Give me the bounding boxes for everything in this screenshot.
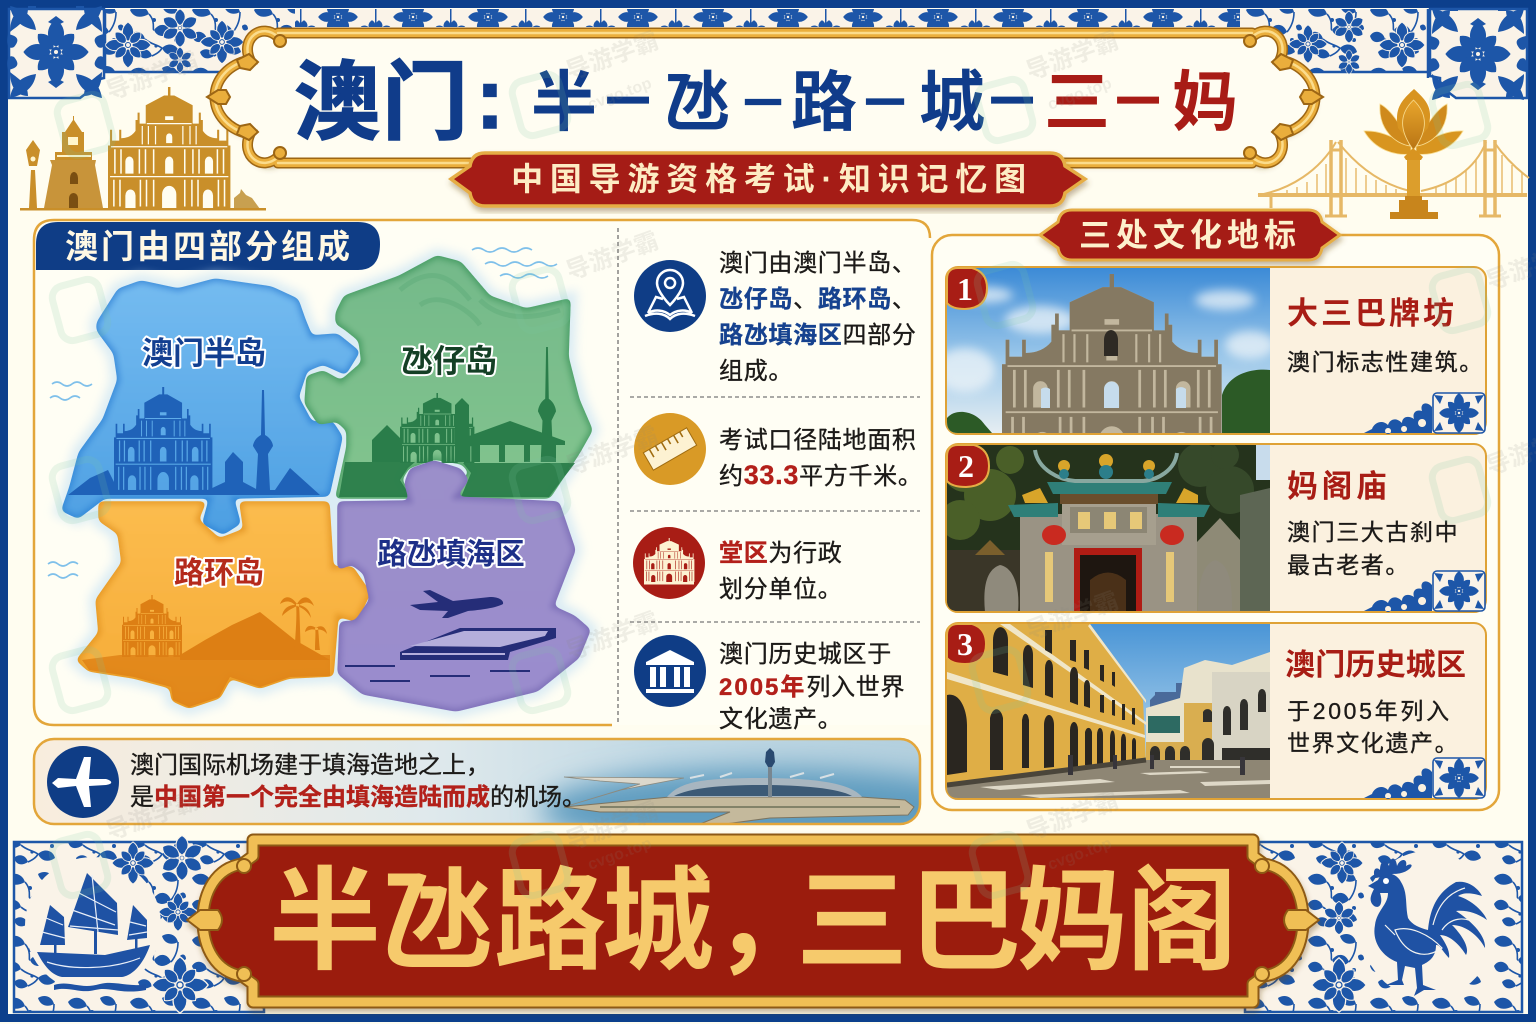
icon: golden lotus [1364,89,1463,219]
plaque text: 半 [269,859,381,984]
title mnemonic words: 一 [744,84,782,126]
text: world heritage: 文化遗产。 [719,706,842,733]
right side buildings [1146,652,1270,742]
text: land area: 考试口径陆地面积 [719,427,917,454]
card 2 description: 澳门三大古刹中 [1287,519,1459,545]
text: composition: 氹仔岛 [719,286,793,313]
text: composition: 澳门由澳门半岛、 [719,250,917,277]
watermarks: cvgo.top [586,75,654,114]
text: world heritage: 澳门历史城区于 [719,641,892,668]
airport terminal [400,628,556,660]
fact: composition [634,250,917,385]
callout text: 澳门国际机场建于填海造地之上， [130,752,490,779]
plaque text: 城 [602,859,714,984]
title mnemonic words: 路 [791,65,857,139]
panel heading ribbon: 三处文化地标 [1079,217,1301,253]
title mnemonic words: 半 [531,65,597,139]
temple door [1074,548,1142,612]
watermarks: 导游学霸 [103,47,202,106]
number badge 2: 2 [958,448,974,484]
icon: ruler [634,413,706,485]
divider dashed vertical [617,228,619,725]
title text [294,51,504,151]
title mnemonic words: 一 [990,78,1034,127]
card 3 description: 于2005年列入 [1287,698,1452,724]
icon: airplane badge [47,746,119,818]
plaque text: 三 [796,859,908,984]
card 3 description: 世界文化遗产。 [1287,730,1459,756]
temple roofs [1008,482,1210,517]
bottom tile band right [1245,840,1522,1015]
façade arched openings [1041,382,1186,408]
watermarks: cvgo.top [586,835,654,874]
fact: world heritage [634,635,905,733]
title mnemonic words: 一 [606,78,650,127]
icon: junk ship [37,873,150,992]
icon: small ruin [234,189,260,209]
plaque text: 巴 [909,859,1021,984]
callout text: 中国第一个完全由填海造陆而成的机场。 [154,784,586,811]
ground line [20,208,266,210]
watermarks: cvgo.top [1046,75,1114,114]
number badge 1: 1 [957,271,973,307]
card 1 description: 澳门标志性建筑。 [1287,349,1484,375]
label: 路环岛: 路环岛 [174,557,264,590]
bridge [1258,140,1529,216]
photo: A-Ma temple gate [940,441,1270,612]
text: composition: 四部分 [842,322,917,349]
text: land area: 33.3平方千米。 [744,460,923,490]
watermarks: 导游学霸 [563,227,662,286]
title banner [207,31,1323,164]
icon: guia lighthouse [44,116,103,208]
title text: 澳 [294,55,380,151]
text: composition: 路氹填海区 [719,322,842,349]
text: land area: 约 [719,463,744,490]
fact: parishes [633,527,843,603]
tile corner [1364,756,1485,800]
number badge 1 [947,268,987,309]
ornate gold frame [207,31,1323,163]
gold landmarks skyline left [20,87,266,210]
title mnemonic words: 三 [1044,65,1110,139]
plaque gold frame [187,840,1319,1002]
water ripples [48,248,557,578]
plaque text: 路 [494,859,606,984]
icon: ruins of st paul facade [108,87,230,209]
title text: : [476,51,504,147]
bottom mnemonic plaque [187,840,1319,1002]
airport callout band [32,738,922,826]
corner tile top right [1429,8,1527,100]
corner tile top left [7,6,105,98]
number badge 2 [947,445,989,487]
distant blue towers [1150,683,1182,707]
watermarks: 导游学霸 [1023,587,1122,646]
puzzle piece: Macau Peninsula [63,280,358,533]
card 1: Ruins of St Paul [945,266,1487,435]
stone lions [984,565,1018,611]
left arcaded yellow building [947,624,1146,785]
icon: street lamp [26,140,40,208]
top azulejo tile frieze [103,9,1430,78]
card 2 description: 最古老者。 [1287,552,1410,578]
photo: Senado Square [947,624,1270,798]
panel heading tab: 澳门由四部分组成 [65,228,353,265]
icon: map pin on book [634,260,706,332]
icon: classical museum [634,635,706,707]
fact: land area [634,413,923,490]
icon: church building [633,527,705,599]
title mnemonic words: 一 [1116,78,1160,127]
title mnemonic words: 氹 [664,65,730,139]
text: composition: 、路环岛、 [793,286,917,313]
temple plaque characters [1045,512,1174,602]
text: world heritage: 2005年 [719,674,806,701]
panel: three cultural landmarks [932,210,1499,810]
text: world heritage: 列入世界 [806,674,905,701]
text: parishes: 划分单位。 [719,576,842,603]
text: composition: 组成。 [719,358,793,385]
panel heading tab [36,222,380,270]
card 3: Historic Centre [946,623,1486,800]
number badge 3: 3 [957,626,973,662]
band border [34,739,920,824]
puzzle piece: Cotai [339,462,589,710]
watermarks: 导游学霸 [563,797,662,856]
plaque text: 氹 [381,859,493,984]
puzzle piece: Coloane [78,503,369,707]
icon: Portuguese rooster [1368,858,1487,996]
puzzle map [63,257,591,710]
text: parishes: 为行政 [768,540,843,567]
cobblestone pavement [947,760,1270,798]
title mnemonic words: 城 [919,65,985,139]
plaque text [269,859,1238,984]
watermarks: 导游学霸 [1023,27,1122,86]
watermarks: 导游学霸 [103,787,202,846]
panel: four parts of Macau [34,220,930,733]
gold bridges and lotus right [1258,89,1529,219]
card 3 title: 澳门历史城区 [1285,649,1466,682]
plaque text: 阁 [1126,859,1238,984]
watermarks: 导游学霸 [563,27,662,86]
plaque text: ， [712,859,824,984]
watermarks: 导游学霸 [1023,787,1122,846]
label: 澳门半岛: 澳门半岛 [142,336,266,371]
card 2 title: 妈阁庙 [1287,469,1390,504]
water wash around puzzle [63,257,591,710]
icon: airplane [410,590,503,618]
puzzle piece: Taipa [306,257,591,497]
title mnemonic words [531,65,1238,139]
text: parishes: 堂区 [719,540,768,567]
plaque text: 妈 [1016,859,1128,984]
label: 氹仔岛: 氹仔岛 [401,343,497,379]
callout text: 是 [130,784,154,811]
subtitle ribbon: 中国导游资格考试·知识记忆图 [511,161,1033,197]
watermarks: 导游学霸 [563,422,662,481]
photo: ruins facade [947,268,1270,433]
lanterns [1042,525,1184,545]
title text: 门 [382,55,468,151]
watermarks: 导游学霸 [563,607,662,666]
number badge 3 [947,624,986,664]
tile corner [1364,391,1485,435]
title mnemonic words: 一 [865,82,905,126]
tile corner [1364,569,1485,613]
label: 路氹填海区: 路氹填海区 [377,538,525,571]
watermarks: cvgo.top [1046,835,1114,874]
panel heading ribbon [1040,210,1340,260]
title mnemonic words: 妈 [1172,65,1238,139]
bottom tile band left [14,836,264,1016]
card 1 title: 大三巴牌坊 [1287,296,1457,331]
card 2: A-Ma Temple [940,441,1486,613]
photo: airport [526,748,919,823]
subtitle ribbon [451,153,1085,206]
